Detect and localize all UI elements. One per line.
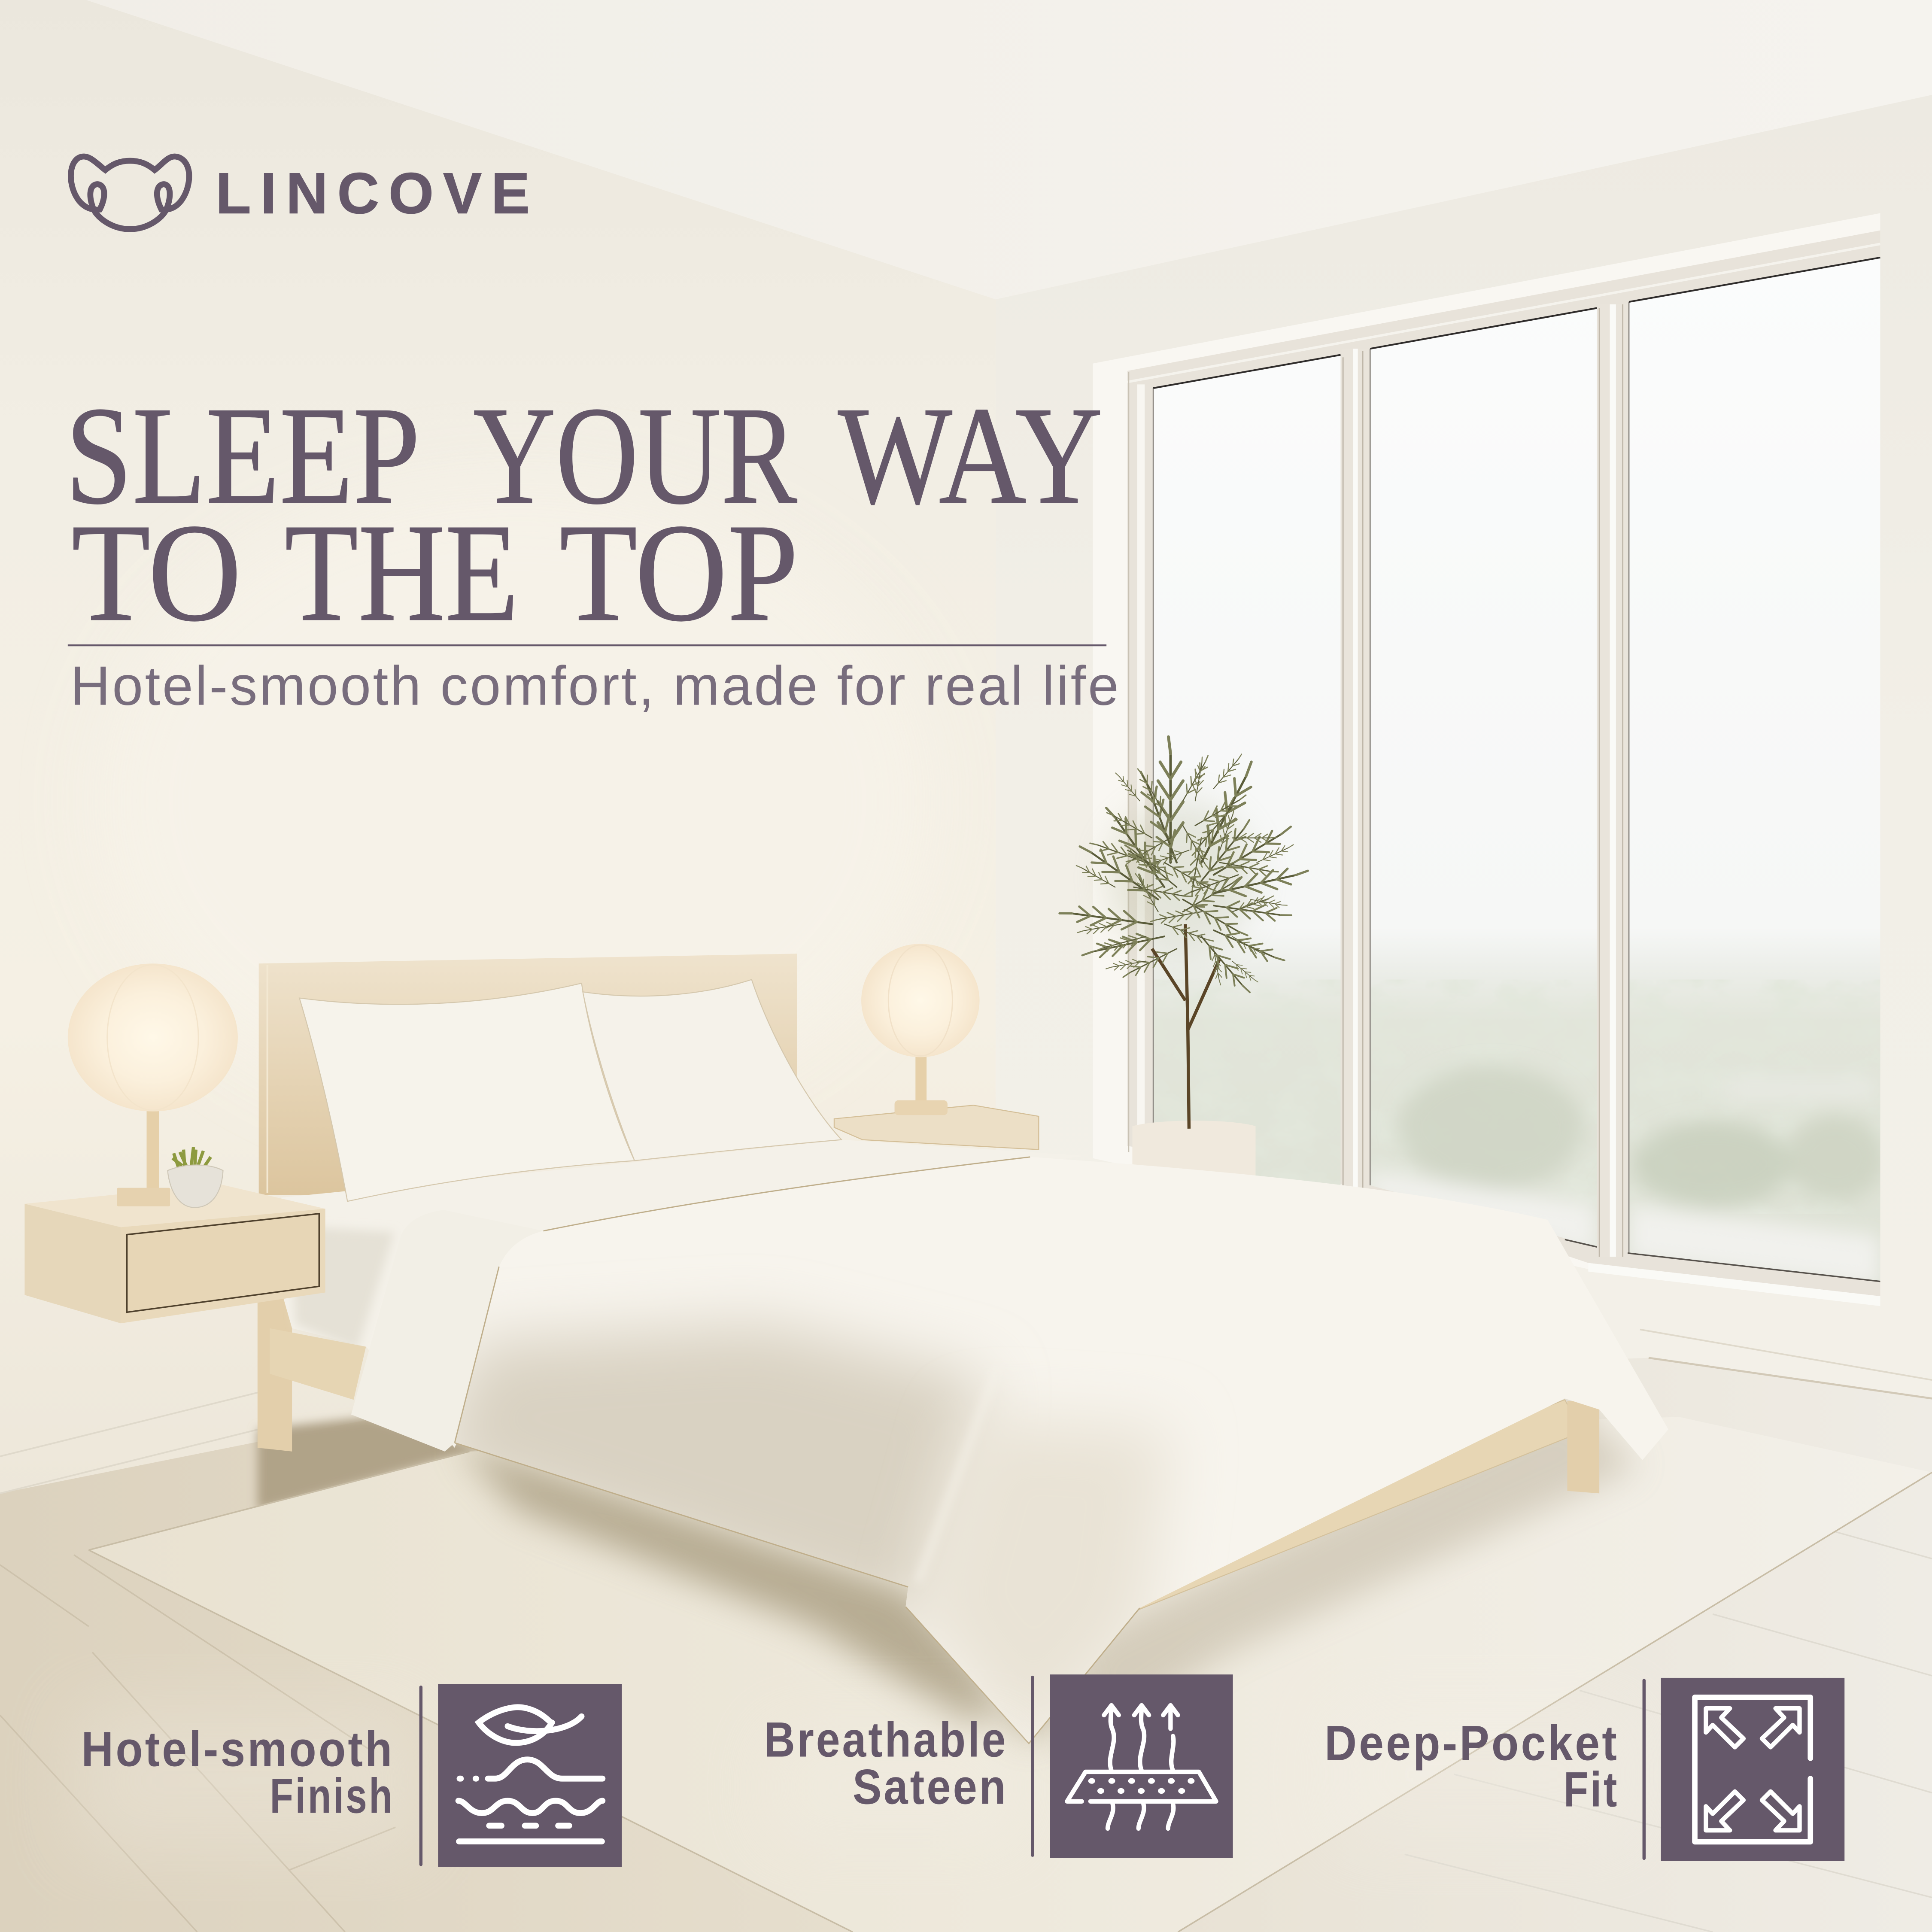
- succulent bowl: [167, 1147, 223, 1207]
- title: WAY: [838, 377, 1103, 533]
- title: YOUR: [473, 377, 798, 533]
- right nightstand: [834, 1105, 1039, 1150]
- floor plank lines: [0, 1522, 1932, 1932]
- drawer: [127, 1214, 319, 1312]
- background: right wall: [996, 95, 1932, 1417]
- left pillow: [299, 983, 635, 1201]
- feature label: Finish: [270, 1768, 394, 1823]
- foliage tone: [1106, 801, 1255, 954]
- logo icon: koala face: [71, 156, 189, 229]
- divider: [1031, 1676, 1034, 1857]
- baseboards: [0, 1330, 1932, 1493]
- icon box: breathable fabric: [1050, 1674, 1233, 1858]
- right lamp: [861, 944, 980, 1115]
- potted tree: [1058, 737, 1310, 1176]
- feature label: Deep-Pocket: [1324, 1716, 1619, 1771]
- feature label: [1324, 1716, 1619, 1817]
- subtitle: Hotel-smooth comfort, made for real life: [70, 655, 1119, 717]
- background: ceiling: [0, 0, 1932, 299]
- icon box: leaf and waves: [438, 1684, 622, 1867]
- duvet: [455, 1157, 1668, 1744]
- title rule: [68, 644, 1106, 646]
- sheet shade: [289, 1226, 394, 1349]
- rug: [89, 1417, 1932, 1932]
- feature: hotel-smooth finish: [81, 1684, 622, 1867]
- nightstand top: [24, 1184, 325, 1227]
- window: [1093, 213, 1885, 1306]
- nightstand side: [24, 1204, 121, 1323]
- icon box: stretch arrows: [1661, 1678, 1844, 1861]
- headboard: [259, 954, 797, 1195]
- sheet: [281, 1140, 1084, 1448]
- logo wordmark: LINCOVE: [216, 161, 530, 225]
- text glows behind features: [74, 1700, 1639, 1854]
- logo: [71, 156, 530, 229]
- title: SLEEP: [65, 377, 420, 533]
- trunk and branches: [1152, 924, 1220, 1129]
- far leg: [1567, 1401, 1599, 1493]
- title: [65, 377, 1103, 650]
- feature label: Fit: [1564, 1762, 1619, 1817]
- background: floor: [0, 1358, 1932, 1932]
- title: TO: [71, 495, 242, 650]
- left nightstand: [24, 1184, 325, 1323]
- far rail: [1133, 1400, 1582, 1612]
- side rail: [270, 1328, 366, 1400]
- nightstand front: [121, 1209, 325, 1323]
- background: wall glow: [99, 480, 936, 1121]
- feature label: Breathable: [764, 1712, 1008, 1767]
- right pillow: [583, 980, 841, 1160]
- window reveal: [1093, 213, 1880, 1306]
- left lamp: [68, 963, 238, 1206]
- window frame: [1127, 231, 1880, 1296]
- dark floor under bed: [258, 1417, 480, 1510]
- title: THE: [285, 495, 519, 650]
- duvet edges: [455, 1157, 1140, 1744]
- feature label: Sateen: [853, 1760, 1008, 1815]
- sheet flap: [351, 1210, 544, 1452]
- feature label: [81, 1722, 394, 1823]
- divider: [1643, 1679, 1646, 1860]
- background: left wall: [0, 0, 996, 1493]
- foliage: [1058, 737, 1310, 998]
- feature label: [764, 1712, 1008, 1815]
- pot: [1132, 1121, 1255, 1176]
- window sill: [1588, 1263, 1880, 1306]
- feature label: Hotel-smooth: [81, 1722, 394, 1777]
- feature: breathable sateen: [764, 1674, 1233, 1858]
- near leg: [258, 1294, 292, 1452]
- feature: deep-pocket fit: [1324, 1678, 1844, 1861]
- title: TOP: [559, 495, 799, 650]
- outdoor view: [1146, 246, 1885, 1294]
- under-bed shadow: [456, 1398, 1639, 1762]
- duvet shading: [431, 1324, 1170, 1762]
- divider: [419, 1686, 422, 1866]
- bed: [258, 954, 1668, 1762]
- window mullions: [1127, 244, 1880, 1282]
